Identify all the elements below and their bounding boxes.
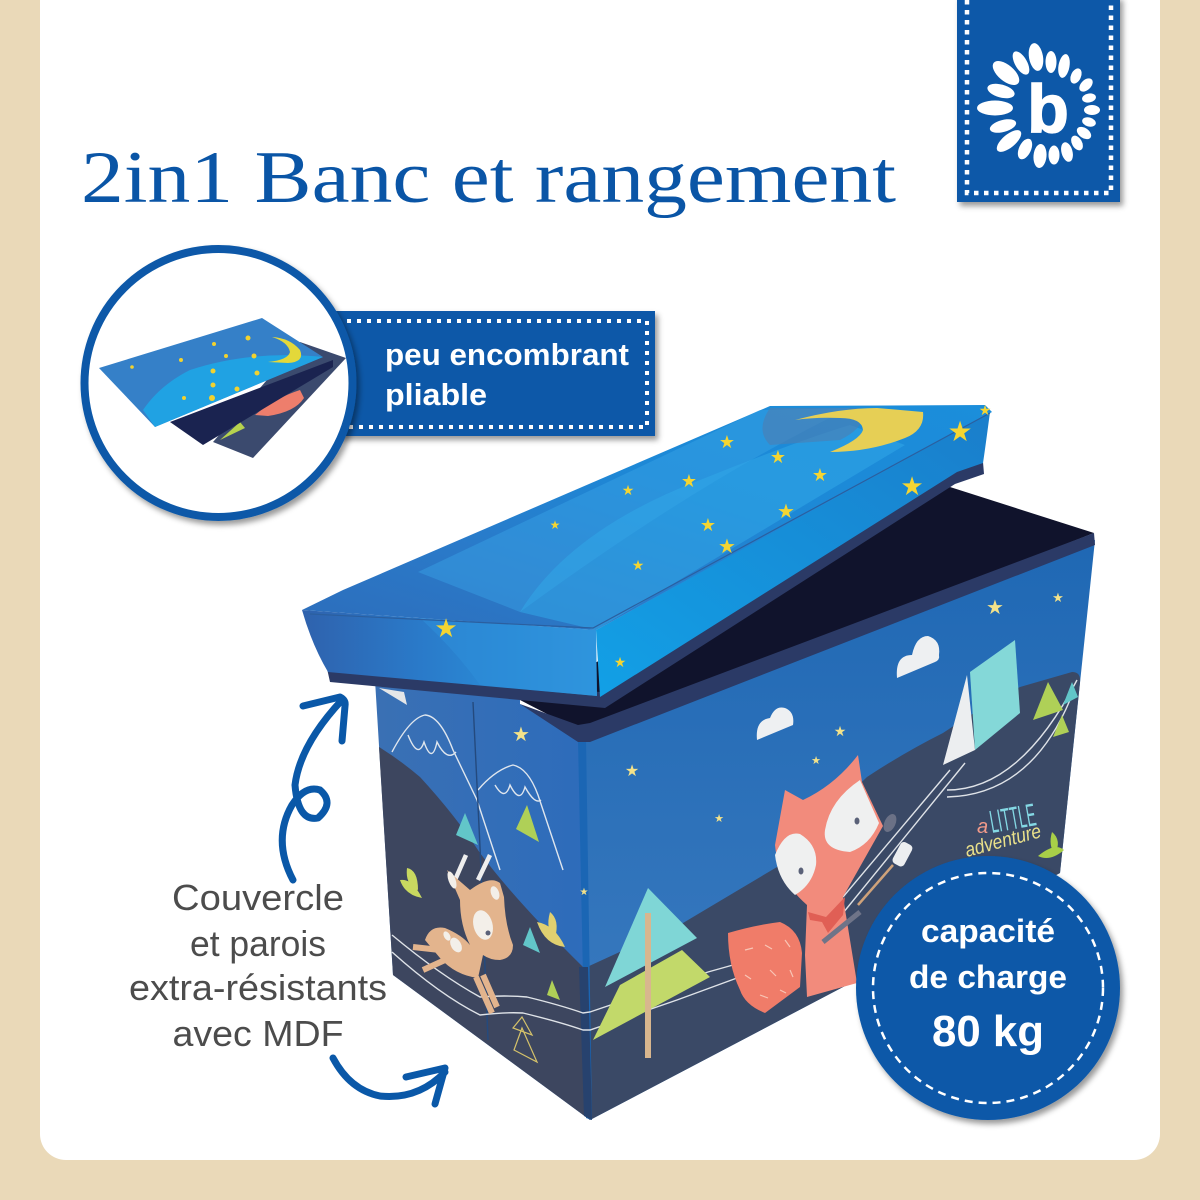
fox — [728, 755, 914, 1013]
arrow: to box bottom — [333, 1058, 445, 1104]
lid top — [302, 405, 992, 630]
title: 2in1 Banc et rangement — [81, 137, 897, 219]
logo badge — [957, 0, 1120, 202]
folded lid top — [99, 318, 323, 427]
big tree — [593, 888, 710, 1058]
box interior — [520, 487, 1094, 730]
lid front skirt — [302, 610, 597, 696]
stars: ★ — [700, 515, 716, 535]
stars: ★ — [900, 471, 924, 501]
mountain lines — [392, 715, 563, 870]
ground lines — [392, 680, 1077, 1030]
logo badge: b — [1027, 71, 1069, 147]
stars: ★ — [812, 465, 828, 485]
stars: ★ — [811, 755, 821, 767]
stars: ★ — [714, 813, 724, 825]
stars: ★ — [632, 557, 644, 573]
text: couvercle: et parois — [190, 923, 326, 964]
stars: ★ — [1052, 590, 1064, 605]
stars: ★ — [979, 402, 991, 418]
arrow: up to lid — [282, 697, 345, 880]
stars: ★ — [719, 432, 735, 452]
callout: peu encombrant pliable: pliable — [385, 377, 487, 412]
inset circle: folded product — [84, 249, 352, 517]
box text — [963, 796, 1044, 862]
stars: ★ — [622, 482, 634, 498]
badge: capacity: 80 kg — [932, 1007, 1044, 1056]
stars: ★ — [550, 518, 560, 532]
icon: flower petals — [977, 42, 1100, 169]
stars — [434, 402, 1064, 898]
stars: ★ — [625, 763, 639, 780]
stars: ★ — [777, 501, 795, 523]
right trees — [1033, 682, 1078, 737]
box left side — [375, 680, 590, 1120]
small trees and plants — [400, 805, 1064, 1062]
lid right skirt — [596, 412, 990, 697]
stars: ★ — [580, 887, 589, 898]
deer — [413, 855, 513, 1013]
moon — [268, 337, 301, 363]
badge: capacity: capacité — [921, 913, 1055, 949]
rim — [520, 533, 1095, 742]
folded dark panel — [170, 360, 333, 445]
stars: ★ — [681, 471, 697, 491]
box front side — [585, 540, 1095, 1120]
stars: ★ — [718, 536, 736, 558]
lid strip — [326, 462, 984, 708]
box text: adventure — [963, 820, 1044, 862]
text: couvercle: avec MDF — [172, 1013, 344, 1054]
box text: a — [977, 816, 988, 838]
stars: ★ — [614, 654, 626, 670]
moon — [795, 408, 923, 452]
tent — [943, 640, 1020, 765]
callout: peu encombrant pliable — [320, 311, 655, 436]
product: storage bench — [302, 402, 1095, 1120]
box text: LITTLE — [987, 796, 1039, 840]
badge: capacity — [856, 856, 1120, 1120]
white scrap — [379, 688, 407, 705]
badge: capacity: de charge — [909, 959, 1067, 995]
folded bottom panel — [213, 342, 346, 458]
stars: ★ — [947, 416, 973, 447]
left side dark hill — [379, 747, 590, 1120]
stars: ★ — [770, 447, 786, 467]
stars: ★ — [512, 724, 530, 746]
callout: peu encombrant pliable: peu encombrant — [385, 337, 629, 372]
text: couvercle: Couvercle — [172, 877, 344, 918]
stars: ★ — [834, 723, 846, 739]
front dark hill — [587, 672, 1080, 1120]
clouds — [897, 636, 939, 678]
text: couvercle: extra-résistants — [129, 967, 387, 1008]
text: couvercle — [129, 877, 387, 1054]
corner seam — [578, 738, 592, 1120]
stars: ★ — [434, 613, 458, 643]
stars: ★ — [986, 597, 1004, 619]
